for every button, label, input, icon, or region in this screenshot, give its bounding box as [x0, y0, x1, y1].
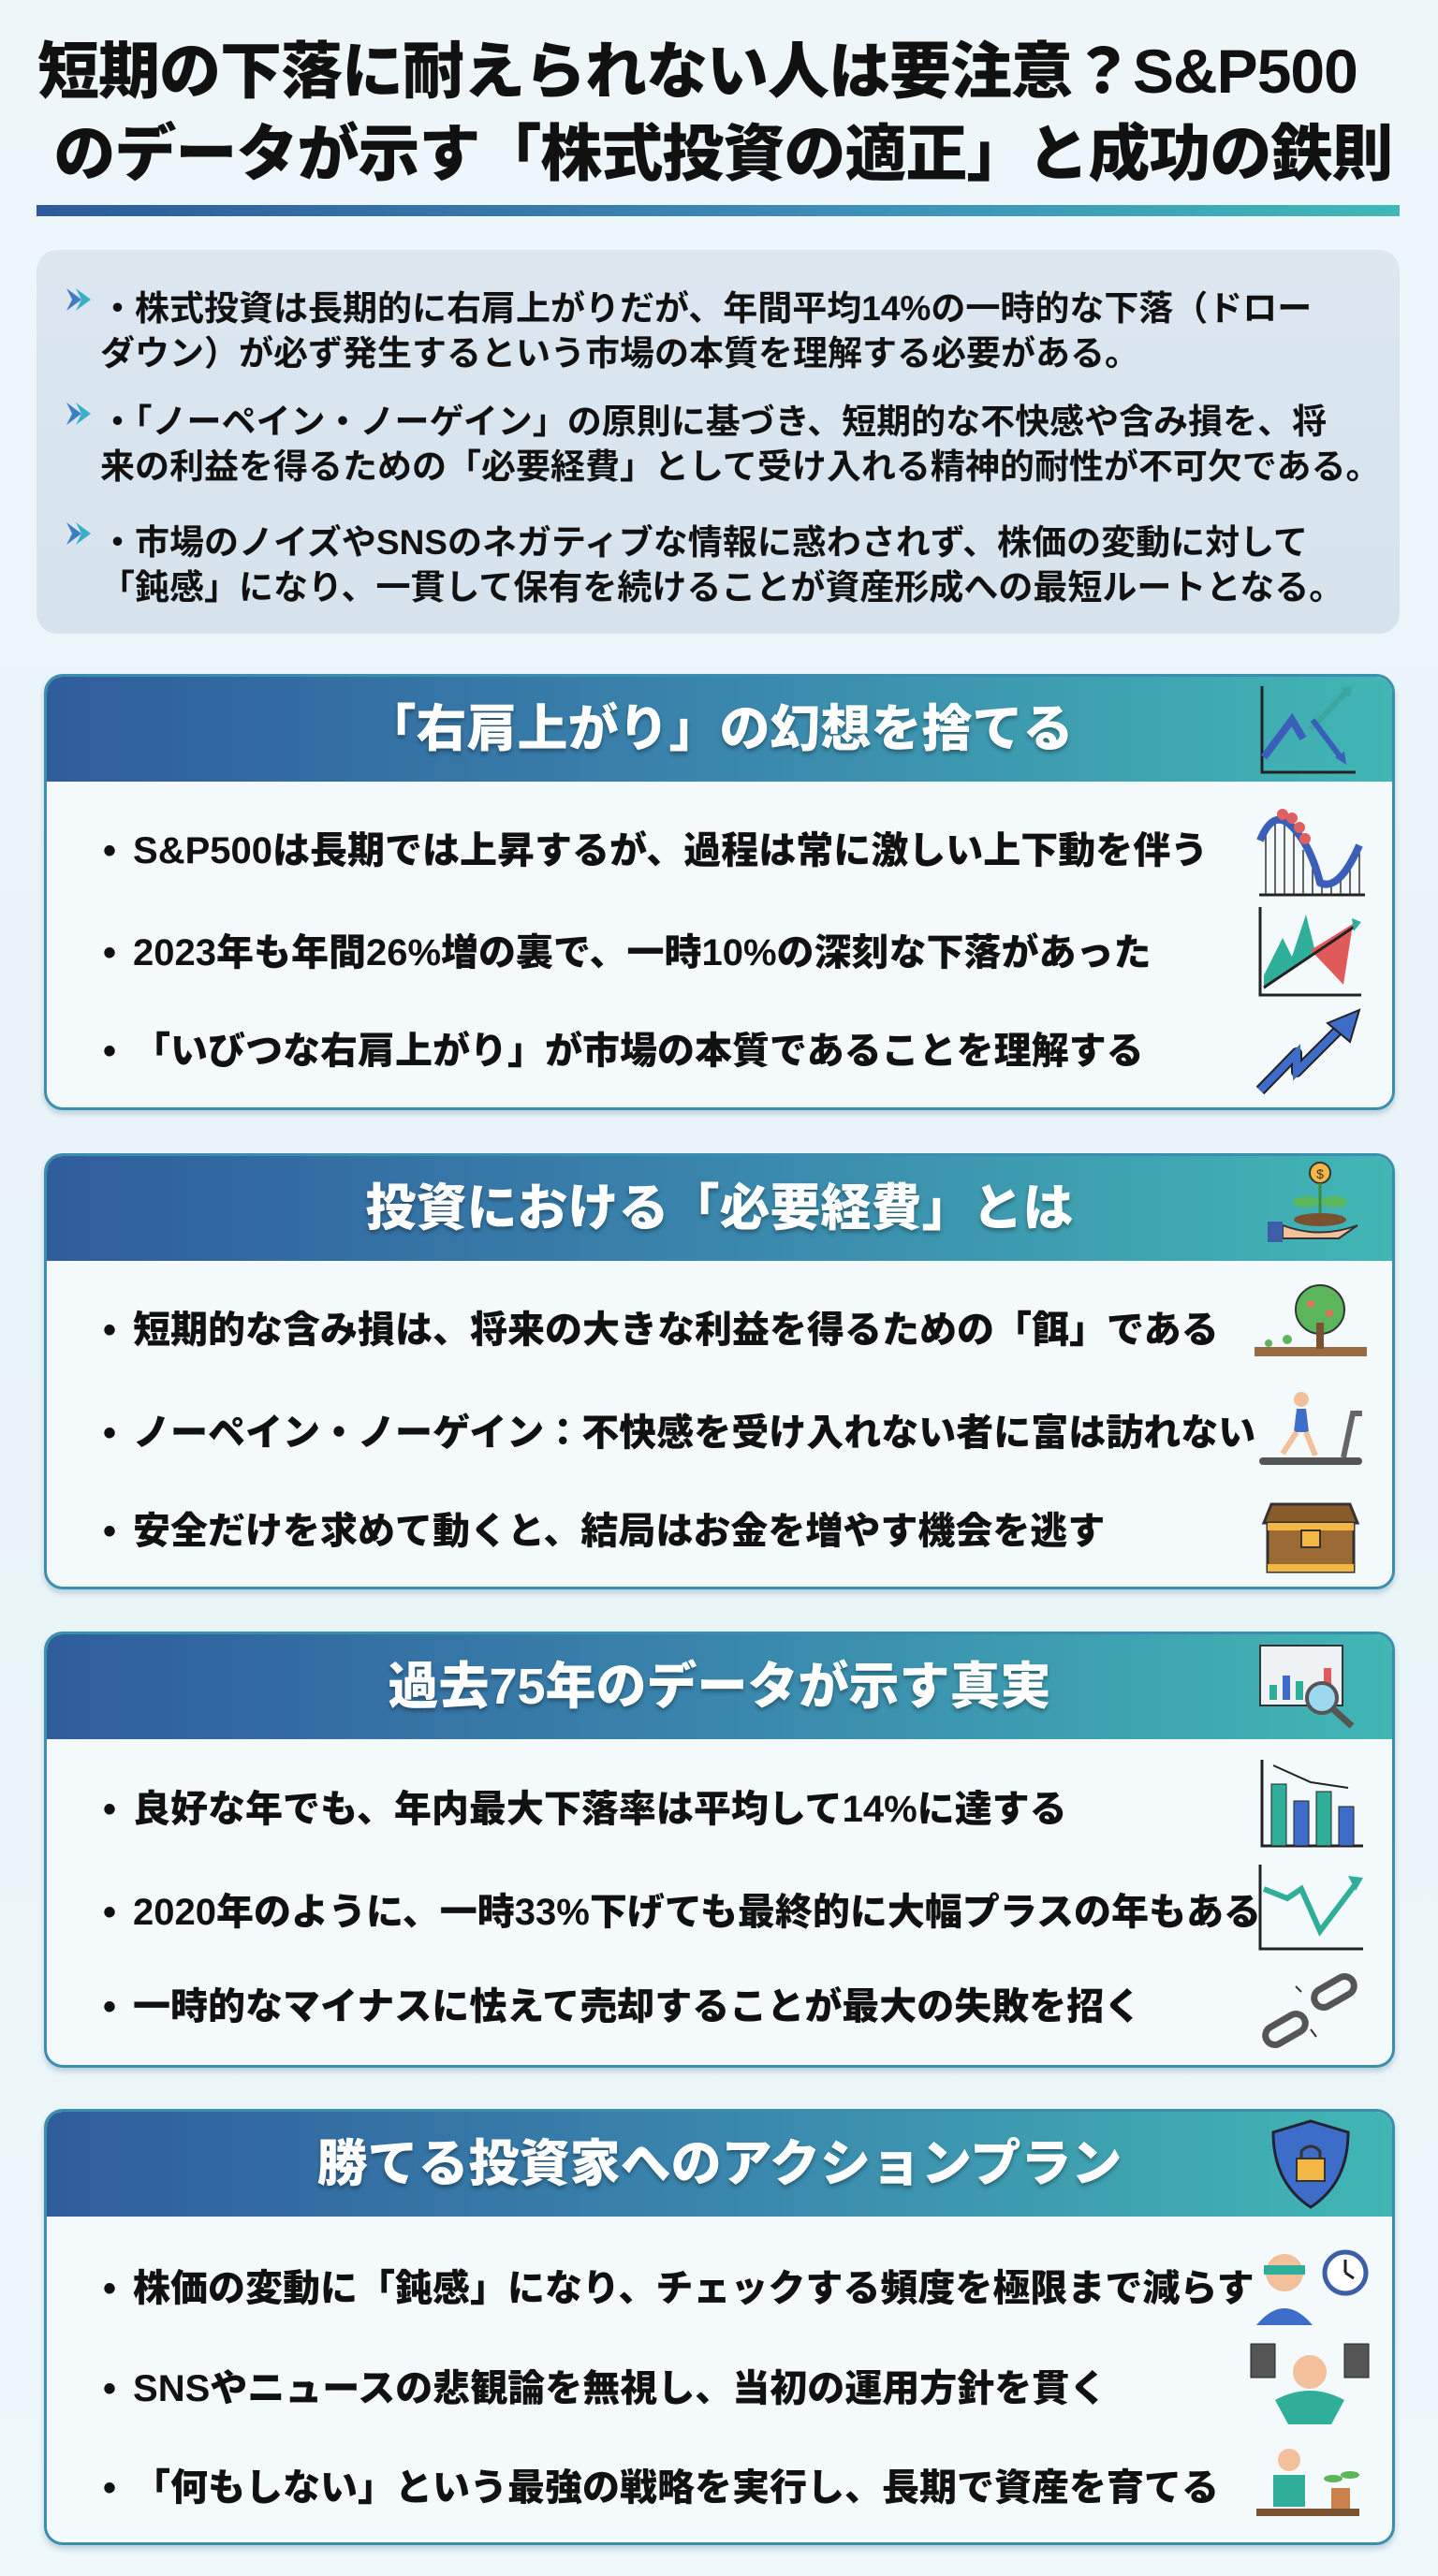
panel header: 投資における「必要経費」とは	[365, 1180, 1073, 1237]
bullet 1: 短期的な含み損は、将来の大きな利益を得るための「餌」である	[133, 1310, 1219, 1351]
bullet 3: 「何もしない」という最強の戦略を実行し、長期で資産を育てる	[133, 2467, 1219, 2509]
panel header	[47, 677, 1392, 782]
summary bullet 1	[66, 288, 1312, 373]
icon: chart with magnifier	[1259, 1645, 1354, 1728]
panel: アクションプラン	[44, 2109, 1395, 2545]
icon: tree growing	[1255, 1284, 1367, 1356]
panel header	[47, 2112, 1392, 2217]
icon: shield lock	[1271, 2119, 1350, 2209]
summary bullet 2	[66, 402, 1381, 486]
bullet 3: 「いびつな右肩上がり」が市場の本質であることを理解する	[133, 1031, 1144, 1072]
title: のデータが示す「株式投資の適正」と成功の鉄則	[53, 119, 1392, 188]
panel: summary: 「鈍感」になり、一貫して保有を続けることが資産形成への最短ルートとなる。	[100, 568, 1343, 607]
bullet 1: S&P500は長期では上昇するが、過程は常に激しい上下動を伴う	[133, 830, 1208, 871]
icon: declining bars	[1260, 1760, 1363, 1848]
panel: summary: ・市場のノイズやSNSのネガティブな情報に惑わされず、株価の変動に対して	[100, 523, 1308, 562]
summary bullet 3	[66, 522, 1343, 607]
icon: blindfolded person with stopwatch	[1256, 2250, 1369, 2325]
panel: 過去75年のデータ	[44, 1632, 1395, 2068]
icon: hand with sprout coin	[1268, 1162, 1357, 1242]
panel: summary	[37, 250, 1400, 634]
panel: summary: 来の利益を得るための「必要経費」として受け入れる精神的耐性が不可欠である。	[100, 447, 1381, 486]
title: 短期の下落に耐えられない人は要注意？S&P500	[37, 37, 1357, 106]
bullet 2: 2023年も年間26%増の裏で、一時10%の深刻な下落があった	[133, 932, 1152, 973]
title	[37, 37, 1392, 188]
icon: zigzag up arrow	[1256, 1008, 1361, 1095]
panel header	[47, 1634, 1392, 1739]
panel: summary: ・株式投資は長期的に右肩上がりだが、年間平均14%の一時的な下落（ドロー	[100, 289, 1312, 328]
bullet 3: 一時的なマイナスに怯えて売却することが最大の失敗を招く	[133, 1986, 1141, 2027]
title underline bar	[37, 205, 1400, 216]
icon: hand with sprout coin: $	[1316, 1166, 1324, 1181]
panel: summary: ダウン）が必ず発生するという市場の本質を理解する必要がある。	[100, 334, 1139, 373]
bullet 1: 株価の変動に「鈍感」になり、チェックする頻度を極限まで減らす	[133, 2268, 1255, 2309]
bullet 2: 2020年のように、一時33%下げても最終的に大幅プラスの年もある	[133, 1892, 1261, 1933]
icon: roller coaster	[1256, 809, 1365, 897]
icon: V recovery chart	[1258, 1865, 1363, 1951]
bullet 2: SNSやニュースの悲観論を無視し、当初の運用方針を貫く	[133, 2368, 1107, 2409]
panel header: 「右肩上がり」の幻想を捨てる	[365, 701, 1073, 757]
icon: broken chain	[1262, 1973, 1357, 2048]
icon: treasure chest	[1262, 1503, 1359, 1573]
panel header	[47, 1156, 1392, 1261]
icon: broken chart arrows	[1260, 686, 1356, 773]
icon: volatile chart	[1258, 907, 1361, 996]
icon: treadmill runner	[1259, 1392, 1362, 1465]
bullet 1: 良好な年でも、年内最大下落率は平均して14%に達する	[133, 1789, 1067, 1830]
panel: summary: ・「ノーペイン・ノーゲイン」の原則に基づき、短期的な不快感や含み損を、将	[100, 402, 1327, 441]
panel: 必要経費	[44, 1153, 1395, 1589]
icon: covering ears	[1251, 2344, 1369, 2424]
icon: person on bench with plant	[1256, 2449, 1359, 2516]
bullet 3: 安全だけを求めて動くと、結局はお金を増やす機会を逃す	[133, 1511, 1105, 1552]
panel: 右肩上がりの幻想	[44, 674, 1395, 1110]
panel header: 勝てる投資家へのアクションプラン	[317, 2136, 1122, 2192]
bullet 2: ノーペイン・ノーゲイン：不快感を受け入れない者に富は訪れない	[133, 1412, 1255, 1454]
panel header: 過去75年のデータが示す真実	[388, 1659, 1051, 1715]
